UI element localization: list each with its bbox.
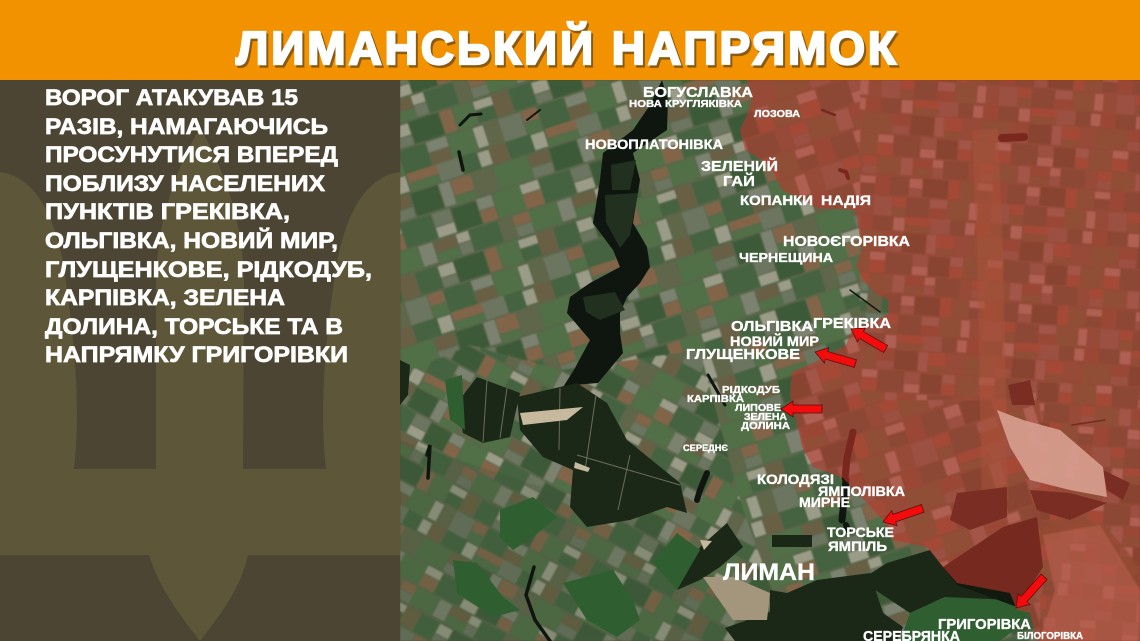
settlement labels: ОЛЬГІВКА: [731, 318, 813, 335]
arrow: Hrekivka: [850, 328, 888, 353]
settlement labels: ЗЕЛЕНИЙ: [701, 157, 778, 175]
streams and small water bodies: [427, 110, 1105, 641]
text block: situation summary: ПУНКТІВ ГРЕКІВКА,: [45, 199, 290, 224]
text block: situation summary: ОЛЬГІВКА, НОВИЙ МИР,: [45, 228, 338, 253]
text block: situation summary: ПОБЛИЗУ НАСЕЛЕНИХ: [45, 171, 325, 196]
settlement labels: КОЛОДЯЗІ: [757, 471, 834, 487]
forests inside occupied area: [943, 380, 1130, 607]
header bar: [0, 0, 1140, 80]
settlement labels: ЛОЗОВА: [754, 108, 800, 120]
text block: situation summary: КАРПІВКА, ЗЕЛЕНА: [45, 285, 285, 310]
settlement labels: НАДІЯ: [821, 192, 871, 208]
settlement labels: КАРПІВКА: [687, 393, 744, 405]
settlement labels: НОВИЙ МИР: [730, 332, 819, 349]
text block: situation summary: ВОРОГ АТАКУВАВ 15: [45, 85, 298, 110]
settlement labels: ЛИПОВЕ: [735, 402, 781, 414]
forest clearings: [483, 380, 680, 510]
text block: situation summary: [45, 85, 372, 367]
green woodland: [445, 375, 1030, 641]
arrow: Hlushchenkove: [814, 347, 857, 368]
text block: situation summary: ПРОСУНУТИСЯ ВПЕРЕД: [45, 142, 338, 167]
pale sand inside occupied area: [997, 410, 1107, 497]
text block: situation summary: РАЗІВ, НАМАГАЮЧИСЬ: [45, 114, 328, 139]
text block: situation summary: ГЛУЩЕНКОВЕ, РІДКОДУБ,: [45, 257, 372, 282]
title shadow and text: ЛИМАНСЬКИЙ НАПРЯМОК: [236, 22, 897, 74]
settlement labels: СЕРЕДНЄ: [683, 443, 728, 454]
settlement labels: КОПАНКИ: [740, 192, 813, 208]
settlement labels: ГРИГОРІВКА: [938, 616, 1031, 633]
title shadow and text: ЛИМАНСЬКИЙ НАПРЯМОК: [238, 24, 899, 76]
settlement labels: РІДКОДУБ: [722, 384, 780, 396]
occupied territory overlay: [740, 80, 1140, 641]
settlement labels: ГАЙ: [723, 172, 755, 190]
icon: trident watermark: [0, 128, 400, 641]
settlement labels: ТОРСЬКЕ: [827, 524, 894, 540]
text block: situation summary: ДОЛИНА, ТОРСЬКЕ ТА В: [45, 314, 343, 339]
map terrain fields: [400, 80, 1140, 641]
settlement labels: НОВА КРУГЛЯКІВКА: [629, 98, 742, 110]
forests near the reservoir: [400, 360, 1010, 641]
settlement labels: БОГУСЛАВКА: [643, 84, 753, 101]
arrow: Torske: [882, 504, 924, 526]
settlement labels: ЯМПІЛЬ: [828, 538, 887, 554]
arrow: Lypove: [781, 401, 822, 417]
settlement labels: [585, 84, 1083, 641]
attack arrows: [781, 322, 1050, 613]
arrow: Hryhorivka: [1016, 574, 1048, 608]
settlement labels: ЯМПОЛІВКА: [818, 483, 905, 499]
reservoir: Oskil river: [560, 80, 668, 392]
settlement labels: ГРЕКІВКА: [813, 315, 891, 332]
panel: satellite map: [400, 80, 1140, 641]
settlement labels: ЧЕРНЕЩИНА: [739, 251, 833, 265]
settlement labels: НОВОЄГОРІВКА: [783, 233, 910, 250]
settlement labels: НОВОПЛАТОНІВКА: [585, 136, 723, 152]
reservoir islands: [583, 160, 638, 320]
text block: situation summary: НАПРЯМКУ ГРИГОРІВКИ: [45, 342, 348, 367]
left panel background: [0, 80, 400, 641]
settlement labels: ЛИМАН: [723, 559, 815, 586]
sand patches: [520, 407, 770, 620]
settlement labels: ДОЛИНА: [741, 420, 790, 432]
settlement labels: ГЛУЩЕНКОВЕ: [686, 346, 800, 363]
settlement labels: ЗЕЛЕНА: [744, 411, 787, 423]
settlement labels: МИРНЕ: [799, 494, 850, 510]
